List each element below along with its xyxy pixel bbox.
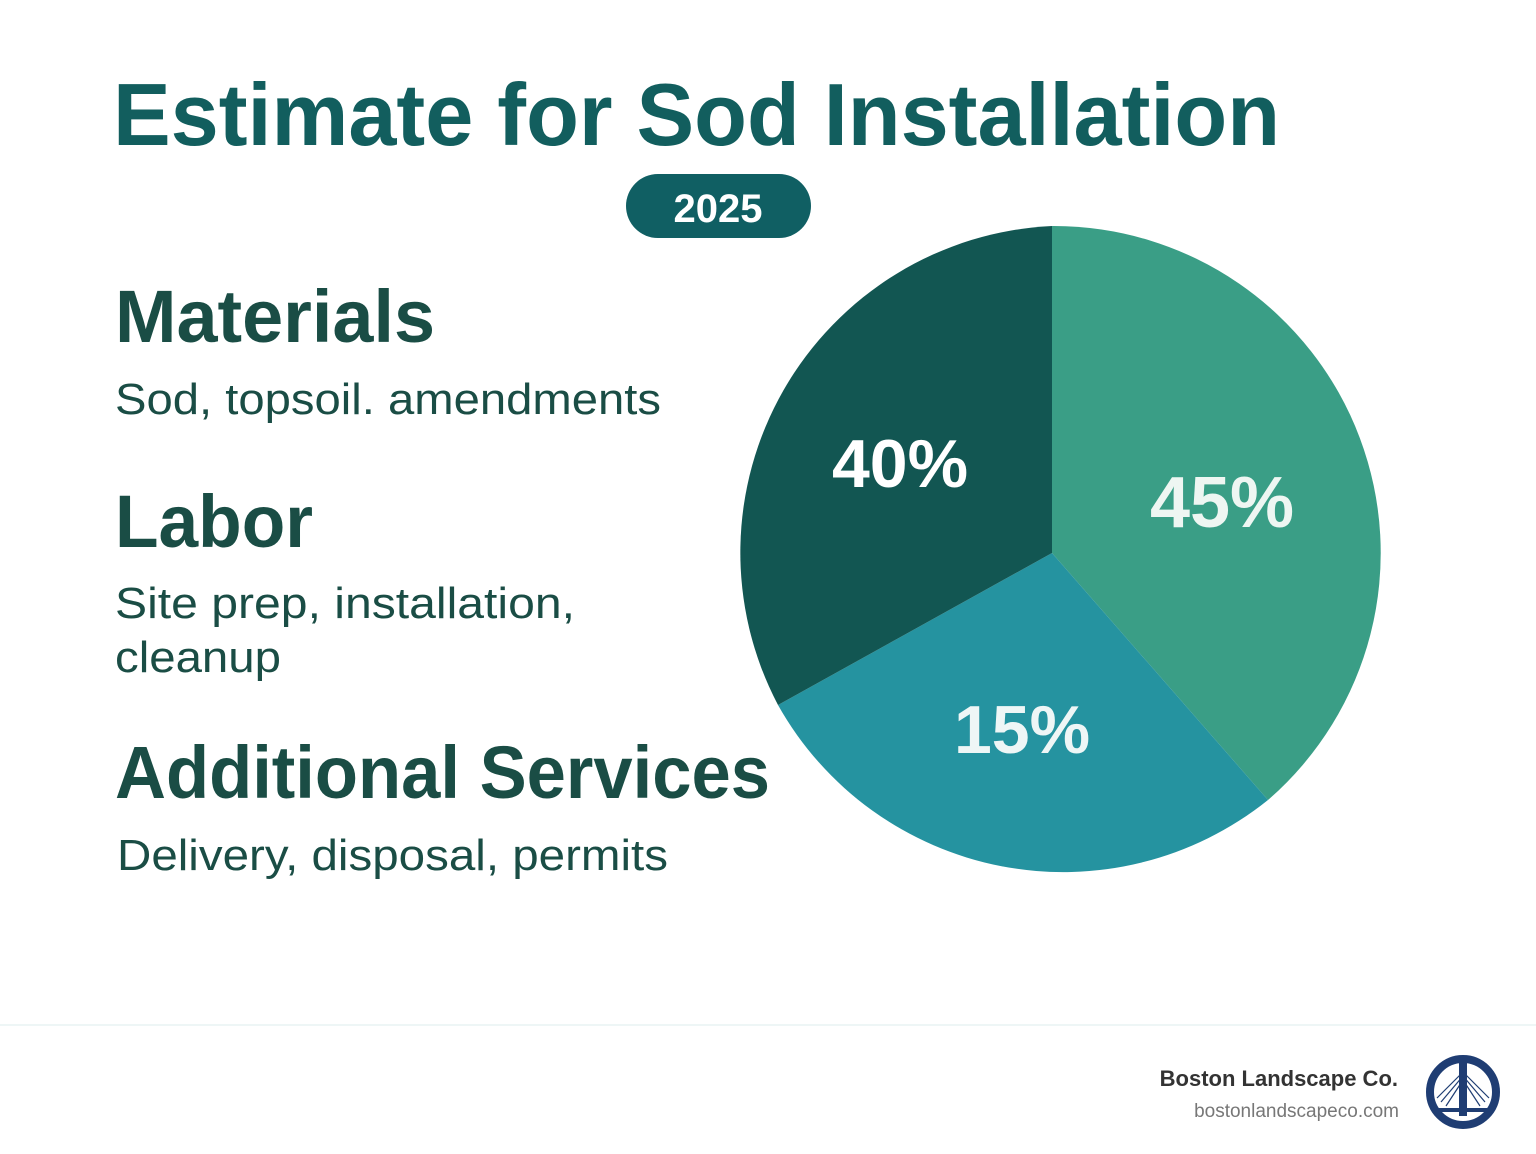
block: labor xyxy=(115,480,575,682)
block: labor: Labor xyxy=(115,480,313,563)
label 15%: 15% xyxy=(954,692,1090,768)
year badge xyxy=(626,174,811,238)
block: materials: Sod, topsoil. amendments xyxy=(115,375,661,424)
label 40%: 40% xyxy=(832,426,968,502)
footer brand xyxy=(1160,1066,1399,1122)
pie chart xyxy=(740,226,1381,872)
title: Estimate for Sod Installation xyxy=(113,65,1280,164)
icon: bridge logo xyxy=(1430,1058,1496,1125)
label 45%: 45% xyxy=(1150,463,1294,543)
block: materials xyxy=(115,275,661,424)
block: labor: Site prep, installation, xyxy=(115,579,575,628)
block: materials: Materials xyxy=(115,275,435,358)
footer brand: bostonlandscapeco.com xyxy=(1194,1101,1399,1122)
year badge: 2025 xyxy=(674,187,762,231)
block: additional services: Additional Services xyxy=(115,731,770,814)
footer brand: Boston Landscape Co. xyxy=(1160,1066,1398,1091)
block: additional services xyxy=(115,731,770,880)
block: labor: cleanup xyxy=(115,633,281,682)
block: additional services: Delivery, disposal, permits xyxy=(117,831,668,880)
